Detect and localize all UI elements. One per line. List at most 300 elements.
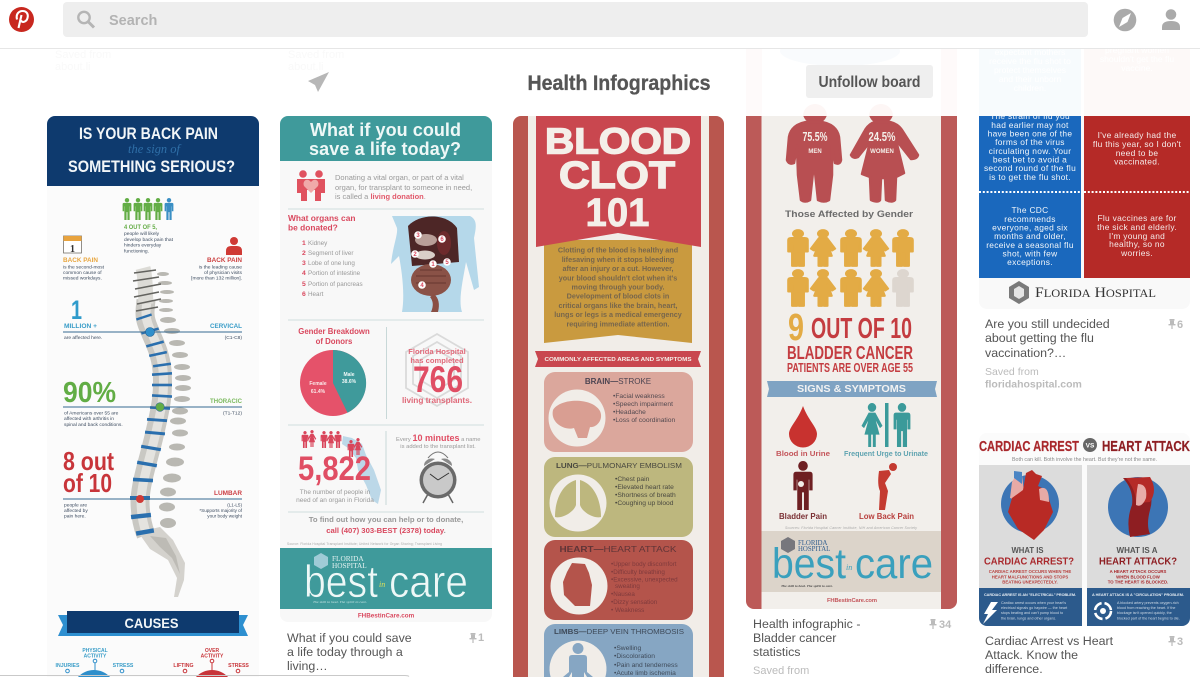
figure: men 75.5% xyxy=(787,101,841,202)
logo band: best in care: The skill to heal. The spirit to care. xyxy=(313,600,367,604)
panel: electrical problem: stops beating and can't pump blood to xyxy=(1001,611,1063,615)
stat: 5,822 people in need: The number of people in xyxy=(300,489,371,496)
gold intro panel: after an injury or a cut. However, xyxy=(562,264,674,273)
logo: Florida Hospital: FLORIDA HOSPITAL xyxy=(1035,285,1156,301)
pin 2: organ donation infographic xyxy=(280,116,492,622)
panel: flu facts: the sick and elderly. xyxy=(1097,222,1177,232)
callout: thoracic: (T1-T12) xyxy=(223,410,242,416)
save source: pin 5: Saved from xyxy=(985,366,1039,378)
panel: brain stroke: •Loss of coordination xyxy=(613,417,675,424)
panel: heart attack: •Excessive, unexpected xyxy=(611,576,678,584)
logo band: best in care: HOSPITAL xyxy=(332,561,367,570)
caption: pin 4: Health infographic - xyxy=(753,617,860,631)
header bar xyxy=(0,0,1200,49)
gender caption: Those Affected by Gender xyxy=(785,209,914,219)
panel: lung embolism xyxy=(544,457,693,537)
faded flu blue panel: and their unborn xyxy=(999,74,1062,84)
save source: pin 5: floridahospital.com xyxy=(985,378,1082,390)
panel: flu facts: receive a seasonal flu xyxy=(986,240,1074,250)
text: physician visits: is the leading cause xyxy=(199,264,242,270)
panel: brain stroke: •Headache xyxy=(613,409,646,416)
chart: gender breakdown pie: Gender Breakdown xyxy=(298,327,370,336)
gold intro panel: your blood shouldn't clot when it's xyxy=(559,274,677,282)
gold intro panel: Clotting of the blood is healthy and xyxy=(558,246,678,254)
list: organs that can be donated: be donated? xyxy=(288,222,338,232)
panel: flu facts: shot, with few xyxy=(1003,248,1058,258)
causes diagram: over activity: LIFTING xyxy=(173,663,194,669)
callout: lumbar: LUMBAR xyxy=(214,490,242,497)
text: living donation definition: living donation. xyxy=(370,192,426,201)
pin 5: flu vaccination infographic xyxy=(979,111,1190,309)
stat: 4 out of 5: develop back pain that xyxy=(124,237,174,243)
save count: pin 4 xyxy=(930,619,952,631)
callout: lumbar: people are xyxy=(64,502,87,508)
stat: every 10 minutes with alarm clock: is added to the transplant list. xyxy=(400,444,476,450)
caption: pin 2: living… xyxy=(287,659,328,673)
panel: heart attack: • Weakness xyxy=(611,607,644,614)
logo band: best in care: care xyxy=(855,540,933,588)
panel: lung embolism: •Elevated heart rate xyxy=(615,484,674,491)
ribbon: causes xyxy=(58,611,248,636)
panel: flu facts: I'm young and xyxy=(1109,231,1165,241)
list: organs that can be donated: Segment of liver xyxy=(308,250,354,257)
save count: pin 2: 1 xyxy=(478,632,484,644)
figure: women 24.5%: 24.5% xyxy=(868,129,896,144)
list: organs that can be donated: 4 xyxy=(302,270,306,277)
panel: flu facts: months and older, xyxy=(994,231,1066,241)
faded flu red panel xyxy=(1084,45,1190,116)
panel: circulation problem: blockage isn't opened quickly, the xyxy=(1117,611,1172,615)
chart: gender breakdown pie: 38.6% xyxy=(342,379,357,385)
panel: electrical problem: Cardiac arrest occurs when your heart's xyxy=(1001,601,1066,605)
symptom: low back pain xyxy=(859,463,914,521)
spine vertebral column xyxy=(140,300,163,535)
list: organs that can be donated: Portion of pancreas xyxy=(308,281,363,288)
gold intro panel: moving through your body. xyxy=(572,282,664,292)
panel: flu facts: I've already had the xyxy=(1098,130,1176,140)
panel: heart attack xyxy=(544,540,693,620)
faded figure heads xyxy=(803,104,893,116)
panel: flu facts: everyone, aged six xyxy=(992,222,1068,232)
symptom: low back pain: Low Back Pain xyxy=(859,512,914,521)
logo: Florida Hospital xyxy=(1009,281,1156,304)
red title banner: 101 xyxy=(586,191,650,235)
illustration: torso with organs: 6 xyxy=(440,237,444,243)
stat: 766 living transplants: living transplants. xyxy=(402,395,472,405)
save count: pin 4: 34 xyxy=(939,619,952,631)
chart: gender breakdown pie: 61.4% xyxy=(311,389,326,395)
panel: brain stroke: •Facial weakness xyxy=(613,393,665,400)
symptom: bladder pain xyxy=(779,461,827,521)
list: organs that can be donated: Kidney xyxy=(308,240,328,247)
list: organs that can be donated: 1 xyxy=(302,240,306,247)
panel: heart attack xyxy=(1087,465,1190,588)
panel: flu facts: recommends xyxy=(1004,214,1056,224)
gold intro panel: Development of blood clots in xyxy=(567,292,669,300)
list: organs that can be donated: 6 xyxy=(302,291,306,298)
faded flu red panel: shouldn't get the flu xyxy=(1100,54,1174,64)
faded flu blue panel: children. xyxy=(1014,83,1046,93)
chart: spine illustration xyxy=(130,268,191,597)
stat: 4 out of 5: hinders everyday xyxy=(124,242,162,248)
icon: doctor xyxy=(226,237,242,255)
logo band: best in care xyxy=(762,531,941,592)
website: FHBestinCare.com xyxy=(358,612,415,620)
caption: pin 4: Bladder cancer xyxy=(753,631,836,645)
stat: every 10 minutes with alarm clock xyxy=(396,433,480,503)
gold intro panel: requiring immediate attention. xyxy=(566,320,670,328)
panel: limbs thrombosis: •Pain and tenderness xyxy=(614,662,678,669)
icon: five people xyxy=(123,198,173,220)
source note: Source: Florida Hospital Transplant Institute; United Network for Organ Sharing; Transplant Living xyxy=(287,542,442,546)
callout: lumbar: pain here. xyxy=(64,514,86,520)
stat: 4 out of 5: people will likely xyxy=(124,231,160,237)
text: missed workdays: BACK PAIN xyxy=(63,257,98,264)
panel: circulation problem: A blocked artery prevents oxygen-rich xyxy=(1117,601,1179,605)
text: living donation definition: Donating a vital organ, or part of a vital xyxy=(335,173,464,182)
causes diagram: back injury xyxy=(56,648,134,677)
panel: flu facts: exceptions. xyxy=(1007,257,1053,267)
text: living donation definition: organ, for transplant to someone in need, xyxy=(335,183,472,192)
callout: thoracic: 90% xyxy=(63,377,116,409)
header: back pain title: the sign of xyxy=(128,141,182,156)
spinal discs xyxy=(130,313,172,536)
icon: paper plane xyxy=(308,72,329,92)
unfollow button xyxy=(806,65,933,98)
caption: pin 2: a life today through a xyxy=(287,645,403,659)
save count: pin 5: 6 xyxy=(1177,319,1183,331)
figure: men 75.5%: MEN xyxy=(808,149,822,155)
causes diagram: over activity: ACTIVITY xyxy=(201,654,224,660)
panel: electrical problem: electrical signals go haywire — the heart xyxy=(1001,606,1067,610)
panel: flu facts: is to get the flu shot. xyxy=(989,172,1071,182)
faded flu blue panel xyxy=(979,47,1081,116)
figure: women 24.5%: WOMEN xyxy=(870,149,894,155)
ribbon: commonly affected areas xyxy=(535,351,701,367)
call to action: . xyxy=(444,526,446,535)
panel: lung embolism: •Chest pain xyxy=(615,476,650,483)
panel: heart attack: HEART ATTACK? xyxy=(1099,556,1177,568)
bottom toast edge xyxy=(0,676,409,677)
save count: pin 6: 3 xyxy=(1177,636,1183,648)
panel: lung embolism: •Coughing up blood xyxy=(615,500,674,507)
callout: thoracic: THORACIC xyxy=(210,398,242,405)
stat: 9 out of 10: 9 xyxy=(788,307,804,349)
ribbon: causes: CAUSES xyxy=(124,615,178,631)
faded column 4 stripes xyxy=(746,49,957,116)
panel: circulation problem: blocked part of the heart begins to die. xyxy=(1117,616,1180,620)
panel: flu facts: Flu vaccines are for xyxy=(1097,213,1177,223)
callout: lumbar: of 10 xyxy=(63,468,112,498)
logo band: best in care: The skill to heal. The spirit to care. xyxy=(781,584,833,588)
panel: flu facts: best bet to avoid a xyxy=(993,154,1067,164)
ribbon: commonly affected areas: COMMONLY AFFECTED AREAS AND SYMPTOMS xyxy=(544,357,692,363)
panel: flu facts: healthy, so no xyxy=(1109,239,1165,249)
panel: flu facts: forms of the virus xyxy=(995,137,1065,147)
red title banner: CLOT xyxy=(559,155,675,197)
save count: pin 2 xyxy=(470,632,484,644)
search placeholder: Search xyxy=(109,13,157,29)
ribbon: signs and symptoms xyxy=(767,381,937,397)
stat: 4 out of 5: functioning. xyxy=(124,248,149,254)
logo band: best in care: best xyxy=(772,540,846,588)
chart: gender breakdown pie: Male xyxy=(343,372,355,378)
panel: limbs thrombosis: LIMBS— DEEP VEIN THROMBOSIS xyxy=(554,627,684,636)
list: organs that can be donated: Heart xyxy=(308,291,324,298)
title: cardiac arrest vs heart attack xyxy=(979,438,1190,463)
faded pin text: column 1: about.li xyxy=(55,61,90,73)
faded pin text: column 2: Saved from xyxy=(288,49,344,61)
panel: flu facts: flu this year, so I don't xyxy=(1093,139,1181,149)
list: organs that can be donated: 3 xyxy=(302,260,306,267)
stat: 766 living transplants: Florida Hospital xyxy=(408,347,466,356)
list: organs that can be donated: Portion of intestine xyxy=(308,270,361,277)
callout: cervical xyxy=(63,300,242,340)
ribbon: signs and symptoms: SIGNS & SYMPTOMS xyxy=(797,384,906,395)
illustration: torso with organs: 3 xyxy=(416,233,420,239)
symptom: bladder pain: Bladder Pain xyxy=(779,512,827,521)
icon: search xyxy=(78,12,94,28)
board title: Health Infographics xyxy=(528,72,710,95)
caption: pin 5: vaccination?… xyxy=(985,346,1066,360)
caption: pin 6: difference. xyxy=(985,662,1043,676)
illustration: torso with organs: 1 xyxy=(431,262,435,268)
gold intro panel: lifesaving when it stops bleeding xyxy=(562,255,674,264)
symptom: frequent urge to urinate: Frequent Urge to Urinate xyxy=(844,449,928,458)
caption: pin 6: Attack. Know the xyxy=(985,648,1078,662)
header: back pain title: SOMETHING SERIOUS? xyxy=(68,157,235,176)
panel: flu facts: The strain of flu you xyxy=(990,111,1070,121)
panel: heart attack: •Upper body discomfort xyxy=(611,561,677,568)
pin 3: blood clot infographic xyxy=(513,116,724,677)
header: back pain title: IS YOUR BACK PAIN xyxy=(79,124,218,143)
callout: cervical: (C1-C8) xyxy=(225,335,242,341)
header: organ donation title xyxy=(280,116,492,161)
list: organs that can be donated: Lobe of one lung xyxy=(308,260,355,267)
stat: 5,822 people in need xyxy=(296,430,381,504)
stat: 5,822 people in need: need of an organ in Florida xyxy=(296,497,374,504)
panel: flu facts: The CDC xyxy=(1011,205,1049,215)
call to action: To find out how you can help or to donate, xyxy=(309,515,463,524)
panel: circulation problem: blood from reaching the heart. If the xyxy=(1117,606,1175,610)
logo band: best in care: best xyxy=(304,556,378,607)
header: back pain title xyxy=(47,116,259,186)
call to action: call (407) 303-BEST (2378) today xyxy=(326,526,445,535)
caption: pin 5: about getting the flu xyxy=(985,331,1094,345)
illustration: torso with organs: 5 xyxy=(445,260,449,266)
callout: thoracic: affected with arthritis in xyxy=(64,416,114,422)
logo band: best in care: FLORIDA xyxy=(798,540,828,547)
illustration: torso with organs: 4 xyxy=(420,283,424,289)
panel: heart attack: •Dizzy sensation xyxy=(611,599,658,606)
panel: heart attack: •Difficulty breathing xyxy=(611,569,665,576)
panel: heart attack: TO THE HEART IS BLOCKED. xyxy=(1108,580,1168,584)
caption: pin 2: What if you could save xyxy=(287,631,412,645)
panel: limbs thrombosis xyxy=(544,624,693,677)
panel: cardiac arrest: HEART MALFUNCTIONS AND STOPS xyxy=(992,574,1068,580)
stat: 766 living transplants: 766 xyxy=(413,359,463,400)
text: physician visits: of physician visits xyxy=(204,270,243,276)
header: organ donation title: What if you could xyxy=(310,120,461,140)
panel: cardiac arrest: CARDIAC ARREST? xyxy=(984,556,1074,568)
unfollow button: Unfollow board xyxy=(818,74,920,91)
caption: pin 4: statistics xyxy=(753,645,801,659)
icon grid: 9 of 10 figures xyxy=(788,230,913,306)
pin 6: cardiac arrest vs heart attack infographic xyxy=(979,433,1190,626)
caption: pin 6: Cardiac Arrest vs Heart xyxy=(985,634,1114,648)
panel: flu facts: had earlier may not xyxy=(991,120,1069,130)
source note: Sources: Florida Hospital Cancer Institute, NIH and American Cancer Society xyxy=(785,526,917,530)
panel: limbs thrombosis: •Discoloration xyxy=(614,653,655,660)
list: organs that can be donated: 5 xyxy=(302,281,306,288)
panel: heart attack: WHEN BLOOD FLOW xyxy=(1116,574,1161,580)
illustration: torso with organs: 2 xyxy=(413,252,417,258)
text: missed workdays xyxy=(63,257,105,282)
header: organ donation title: save a life today? xyxy=(309,139,461,159)
panel: heart attack: •Nausea xyxy=(611,591,635,598)
title: cardiac arrest vs heart attack: CARDIAC ARREST xyxy=(979,439,1079,455)
text: missed workdays: common cause of xyxy=(63,270,102,276)
stat: 9 out of 10: OUT OF 10 xyxy=(811,313,912,345)
faded content scrolling under header xyxy=(55,36,1190,116)
list: organs that can be donated: 2 xyxy=(302,250,306,257)
callout: lumbar xyxy=(63,446,243,520)
stat: 4 out of 5: 4 OUT OF 5, xyxy=(124,224,157,231)
panel: flu facts: need to be xyxy=(1116,148,1158,158)
panel: limbs thrombosis: •Acute limb ischemia xyxy=(614,670,676,677)
panel: electrical problem: CARDIAC ARREST IS AN "ELECTRICAL" PROBLEM. xyxy=(984,593,1076,597)
panel: cardiac arrest: WHAT IS xyxy=(1012,545,1044,555)
panel: brain stroke xyxy=(544,372,693,452)
callout: cervical: are affected here. xyxy=(64,335,102,341)
figure: women 24.5% xyxy=(851,101,918,202)
chart: gender breakdown pie xyxy=(298,327,370,416)
causes diagram: over activity: OVER xyxy=(205,648,219,654)
panel: flu facts: circulating now. Your xyxy=(989,146,1071,156)
cervical ridges xyxy=(133,270,161,311)
logo band: best in care: in xyxy=(379,580,385,589)
panel: electrical problem xyxy=(979,588,1082,626)
stat: 9 out of 10: PATIENTS ARE OVER AGE 55 xyxy=(787,360,913,375)
website: FHBestinCare.com xyxy=(827,598,877,604)
faded flu blue panel: expectant mothers xyxy=(995,47,1065,57)
callout: thoracic: spinal and back conditions. xyxy=(64,422,123,428)
save count: pin 6 xyxy=(1168,636,1183,648)
faded flu red panel: pregnant women xyxy=(1105,45,1169,55)
callout: thoracic: of Americans over 55 are xyxy=(64,410,119,416)
panel: brain stroke: •Speech impairment xyxy=(613,401,673,408)
panel: cardiac arrest: BEATING UNEXPECTEDLY. xyxy=(1002,580,1058,584)
gold intro panel: lungs or legs is a medical emergency xyxy=(554,310,682,319)
text: missed workdays: is the second-most xyxy=(63,264,105,270)
panel: electrical problem: the brain, lungs and other organs. xyxy=(1001,616,1056,620)
causes diagram: over activity xyxy=(173,648,249,677)
stat: 9 out of 10 xyxy=(787,307,913,375)
logo band: best in care: HOSPITAL xyxy=(798,546,830,553)
stat: every 10 minutes with alarm clock: Every xyxy=(396,437,412,443)
panel: flu facts: have been one of the xyxy=(988,128,1072,138)
faded pin text: column 1: Saved from xyxy=(55,49,111,61)
pin 1: back pain infographic xyxy=(47,116,259,677)
panel: flu facts xyxy=(979,111,1190,278)
callout: thoracic xyxy=(63,382,242,427)
icon: two people with heart xyxy=(297,170,325,201)
caption: pin 5: Are you still undecided xyxy=(985,317,1110,331)
list: organs that can be donated xyxy=(288,213,363,298)
gold intro panel: critical organs like the brain, heart, xyxy=(558,301,678,310)
illustration: torso with organs xyxy=(391,216,479,312)
panel: lung embolism: LUNG— PULMONARY EMBOLISM xyxy=(556,461,682,470)
text: missed workdays: missed workdays. xyxy=(63,276,102,282)
list: organs that can be donated: What organs can xyxy=(288,213,355,223)
text: physician visits xyxy=(191,257,243,282)
callout: lumbar: *Supports majority of xyxy=(199,508,243,513)
logo band: best in care: care xyxy=(389,556,468,607)
logo band: best in care: FLORIDA xyxy=(332,554,364,563)
faded flu blue panel: protect themselves xyxy=(994,65,1066,75)
save count: pin 5 xyxy=(1168,319,1183,331)
panel: cardiac arrest: CARDIAC ARREST OCCURS WHEN THE xyxy=(989,569,1071,574)
panel: heart attack: HEART— HEART ATTACK xyxy=(560,545,678,554)
gold intro panel xyxy=(544,240,692,343)
icon: user xyxy=(1162,9,1180,30)
callout: lumbar: your body weight xyxy=(207,514,243,518)
faded flu blue panel: receive the flu shot to xyxy=(989,56,1071,66)
panel: circulation problem: A HEART ATTACK IS A "CIRCULATION" PROBLEM. xyxy=(1092,593,1184,597)
callout: lumbar: (L1-L5) xyxy=(227,502,242,508)
title: cardiac arrest vs heart attack: VS xyxy=(1086,442,1095,450)
symptom: frequent urge to urinate xyxy=(844,403,928,458)
spinal processes xyxy=(157,272,191,528)
text: physician visits: BACK PAIN xyxy=(207,257,242,264)
panel: cardiac arrest xyxy=(979,465,1082,588)
logo band: best in care: in xyxy=(846,563,852,572)
panel: flu facts: second round of the flu xyxy=(984,163,1076,173)
panel: brain stroke: BRAIN—STROKE xyxy=(585,377,651,386)
faded speech bubble xyxy=(780,36,900,66)
pin 4: bladder cancer infographic xyxy=(746,101,957,609)
figure: men 75.5%: 75.5% xyxy=(802,129,828,144)
stat: 766 living transplants: has completed xyxy=(410,356,464,365)
faded flu red panel: vaccine. xyxy=(1121,63,1153,73)
panel: heart attack: A HEART ATTACK OCCURS xyxy=(1110,569,1167,574)
panel: heart attack: sweating xyxy=(615,583,640,590)
icon: pinterest logo xyxy=(9,7,34,32)
panel: flu facts: vaccinated. xyxy=(1114,156,1160,166)
icon: calendar xyxy=(64,236,82,255)
stat: 5,822 people in need: 5,822 xyxy=(298,450,371,488)
icon: compass xyxy=(1114,9,1136,31)
panel: limbs thrombosis: •Swelling xyxy=(614,645,642,652)
stat: every 10 minutes with alarm clock: 10 minutes a name xyxy=(412,433,480,443)
chart: gender breakdown pie: of Donors xyxy=(316,337,353,346)
causes diagram: over activity: STRESS xyxy=(228,663,249,669)
chart: gender breakdown pie: Female xyxy=(309,381,327,387)
title: cardiac arrest vs heart attack: Both can kill. Both involve the heart. But they're not the same. xyxy=(1012,457,1157,463)
logo band: best in care xyxy=(280,548,492,609)
text: living donation definition: is called a xyxy=(335,192,370,201)
faded pin text: column 2: about.li xyxy=(288,61,323,73)
panel: lung embolism: •Shortness of breath xyxy=(615,492,676,499)
text: physician visits: [more than 132 million]. xyxy=(191,276,242,282)
callout: cervical: CERVICAL xyxy=(210,323,242,330)
callout: cervical: MILLION + xyxy=(64,323,97,330)
red title banner: BLOOD xyxy=(545,120,691,162)
stat: 9 out of 10: BLADDER CANCER xyxy=(787,343,913,363)
panel: flu facts: worries. xyxy=(1120,248,1153,258)
causes diagram: back injury: STRESS xyxy=(113,663,134,669)
causes diagram: back injury: ACTIVITY xyxy=(84,654,107,660)
